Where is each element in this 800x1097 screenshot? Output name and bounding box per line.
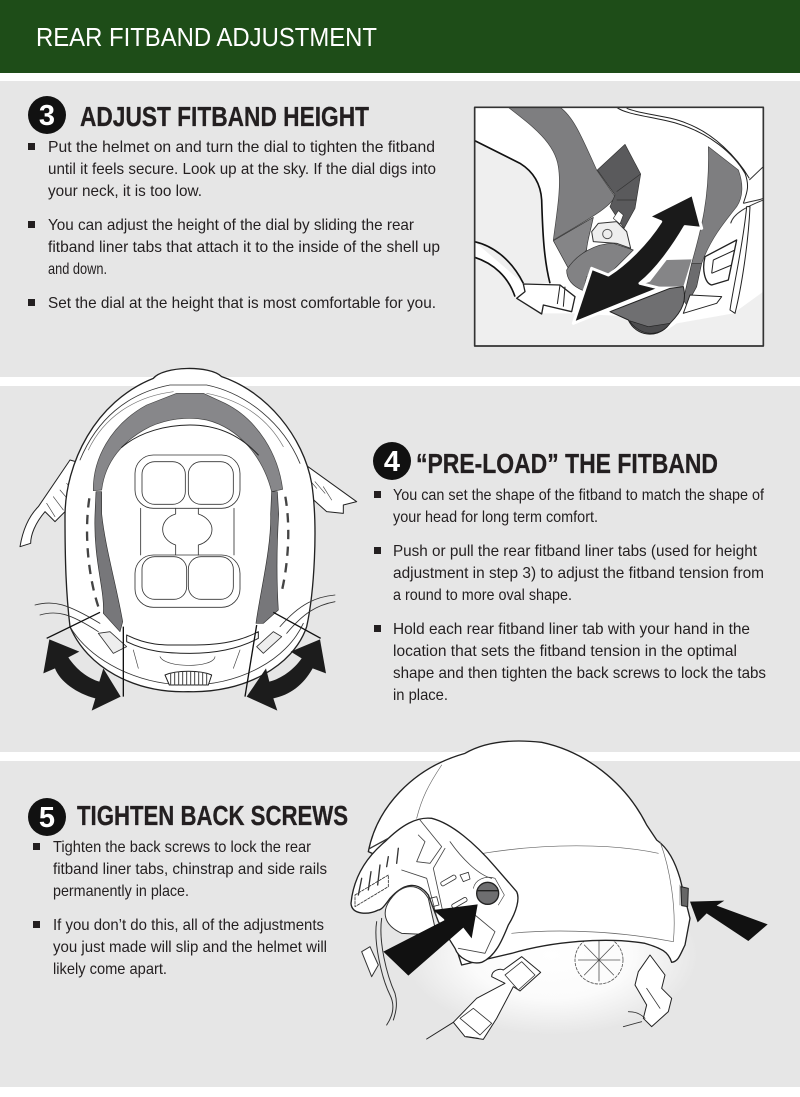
shell seams (417, 765, 680, 942)
step 3 instructions: and down. (48, 261, 107, 278)
step 3 instructions: You can adjust the height of the dial by sliding the rear (48, 217, 415, 234)
rear dial (165, 671, 212, 685)
step 5 instructions: Tighten the back screws to lock the rear (53, 839, 312, 856)
illustration: helmet side view with screw arrows (351, 741, 768, 1039)
lower pad (567, 243, 633, 291)
right liner (692, 147, 742, 263)
step 4 instructions: Push or pull the rear fitband liner tabs (used for height (393, 543, 758, 560)
left side dark strap (95, 492, 123, 632)
step 3 heading: ADJUST FITBAND HEIGHT (80, 101, 369, 132)
step 3 instructions: fitband liner tabs that attach it to the inside of the shell up (48, 239, 440, 256)
step 5 instructions: likely come apart. (53, 961, 167, 978)
step 5 heading: TIGHTEN BACK SCREWS (77, 800, 348, 831)
right buckle (704, 240, 737, 285)
panel: step 5 tighten back screws (0, 761, 800, 1087)
step 5 instructions: If you don’t do this, all of the adjustments (53, 917, 324, 934)
step 4 heading: “PRE-LOAD” THE FITBAND (416, 448, 718, 479)
step 5 instructions: you just made will slip and the helmet will (53, 939, 327, 956)
right side dark strap (256, 492, 279, 623)
left curved arrow (43, 639, 121, 711)
step 3 instructions: Set the dial at the height that is most comfortable for you. (48, 295, 436, 312)
step 4 number badge (373, 442, 411, 480)
step 4 instructions: You can set the shape of the fitband to match the shape of (393, 487, 764, 504)
step 3 number badge (28, 96, 66, 134)
side screw (473, 877, 504, 905)
header banner (0, 0, 800, 73)
lower dark knob (610, 287, 685, 334)
panel: step 4 pre-load the fitband (0, 386, 800, 752)
left strap (20, 460, 93, 547)
step 5 instructions (33, 839, 327, 978)
small black arrow (690, 901, 768, 941)
step 4 instructions: a round to more oval shape. (393, 587, 572, 604)
under helmet fade (405, 875, 698, 1035)
step 5 number badge: 5 (39, 802, 55, 834)
step 5 number badge (28, 798, 66, 836)
shell (65, 368, 315, 692)
dial (575, 936, 623, 984)
shell (368, 741, 690, 965)
step 3 instructions: your neck, it is too low. (48, 183, 202, 200)
rear screw (681, 887, 688, 907)
step 5 instructions: permanently in place. (53, 883, 189, 900)
step 4 instructions: location that sets the fitband tension in the optimal (393, 643, 737, 660)
step 4 instructions: Hold each rear fitband liner tab with your hand in the (393, 621, 750, 638)
straps (453, 957, 541, 1039)
illustration: helmet interior view with rotation arrows (20, 368, 357, 711)
step 3 instructions: until it feels secure. Look up at the sky. If the dial digs into (48, 161, 436, 178)
gray rear fitband pad (93, 393, 283, 492)
tab (597, 144, 641, 228)
right curved arrow (247, 639, 326, 711)
dial (592, 222, 631, 248)
illustration: dial close-up with height arrow (475, 107, 763, 346)
step 3 instructions: Put the helmet on and turn the dial to tighten the fitband (48, 139, 435, 156)
fitband liner left (508, 107, 615, 240)
large black arrow (383, 904, 478, 976)
step 4 instructions (374, 487, 766, 704)
chin strap cords (376, 918, 396, 1025)
step 5 instructions: fitband liner tabs, chinstrap and side rails (53, 861, 327, 878)
step 4 instructions: adjustment in step 3) to adjust the fitband tension from (393, 565, 764, 582)
lower strap ends (35, 595, 335, 633)
header title: REAR FITBAND ADJUSTMENT (36, 22, 377, 52)
neck pad (127, 632, 258, 653)
panel: step 3 adjust fitband height (0, 81, 800, 377)
inner dome line (122, 425, 258, 455)
black double arrow (573, 194, 702, 323)
shell edge (617, 107, 749, 203)
side rail (351, 818, 518, 963)
step 4 instructions: your head for long term comfort. (393, 509, 598, 526)
step 3 number badge: 3 (39, 100, 55, 132)
step 4 instructions: shape and then tighten the back screws to lock the tabs (393, 665, 766, 682)
stitch dashes (87, 498, 98, 607)
step 4 number badge: 4 (384, 446, 400, 478)
crown pads (135, 455, 240, 607)
pointer lines (47, 612, 321, 697)
right strap (282, 455, 357, 513)
step 4 instructions: in place. (393, 687, 448, 704)
left buckle (517, 284, 575, 314)
step 3 instructions (28, 139, 440, 312)
